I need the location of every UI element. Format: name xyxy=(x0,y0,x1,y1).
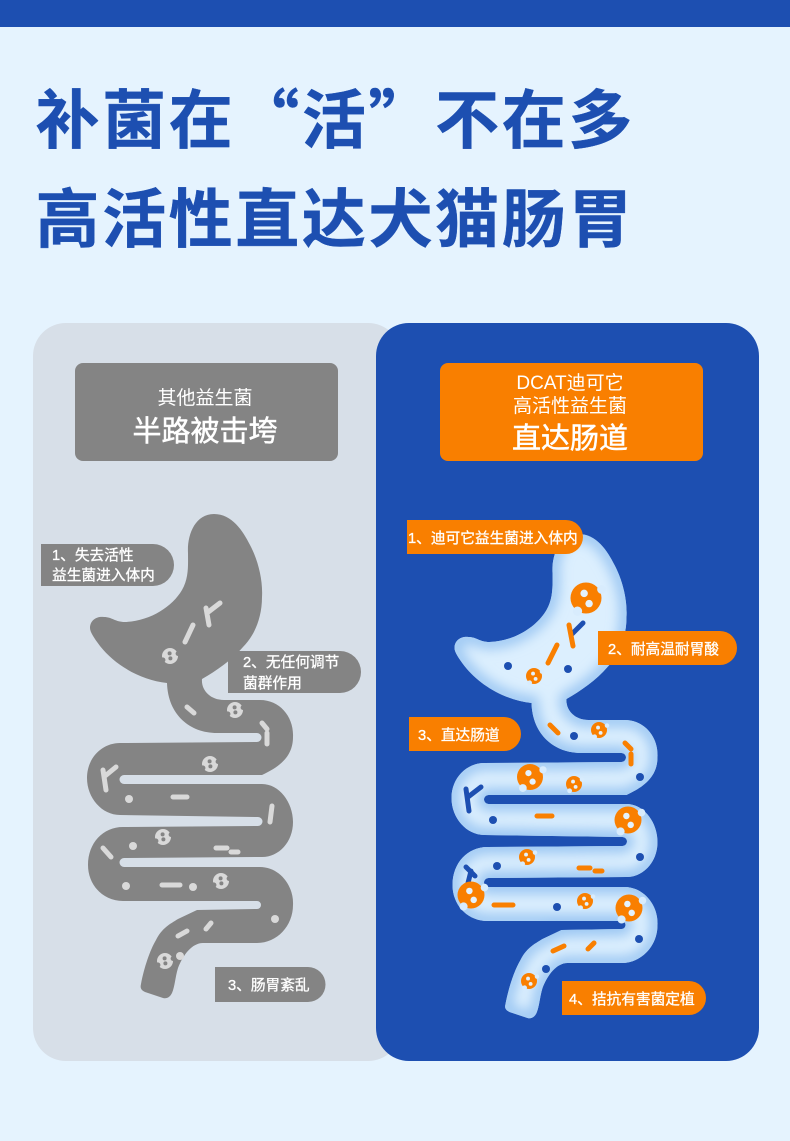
glowing gut illustration xyxy=(452,534,658,1018)
label: reaches the gut: 3、直达肠道 xyxy=(418,727,500,744)
grey gut illustration xyxy=(87,514,293,998)
heading: other probiotics: 其他益生菌 xyxy=(157,387,253,409)
top band xyxy=(0,0,790,27)
label: lost activity: 益生菌进入体内 xyxy=(52,567,155,584)
orange rods xyxy=(494,625,631,951)
heading: DCAT probiotics xyxy=(440,363,703,461)
heading: other probiotics: 半路被击垮 xyxy=(132,415,278,448)
label: lost activity xyxy=(41,544,174,586)
grey rods xyxy=(103,603,272,936)
title xyxy=(36,70,635,261)
grey bacteria xyxy=(153,648,245,969)
heading: DCAT probiotics: 高活性益生菌 xyxy=(513,395,627,417)
title: 高活性直达犬猫肠胃 xyxy=(36,169,635,261)
label: lost activity: 1、失去活性 xyxy=(52,547,134,564)
grey dots xyxy=(122,795,279,960)
label: heat and acid resistant xyxy=(598,631,737,665)
panel: other probiotics xyxy=(33,323,401,1061)
panel: DCAT probiotics xyxy=(376,323,759,1061)
label: no regulating effect xyxy=(228,651,361,693)
label: no regulating effect: 菌群作用 xyxy=(243,675,302,692)
orange bacteria xyxy=(458,582,646,990)
label: gut disorder: 3、肠胃紊乱 xyxy=(228,976,310,994)
title: 补菌在“活”不在多 xyxy=(36,70,635,162)
label: enters the body: 1、迪可它益生菌进入体内 xyxy=(408,529,578,547)
label: enters the body xyxy=(407,520,583,554)
heading: DCAT probiotics: 直达肠道 xyxy=(512,422,628,455)
label: gut disorder xyxy=(215,967,326,1002)
label: no regulating effect: 2、无任何调节 xyxy=(243,654,339,671)
blue dots xyxy=(489,662,644,973)
label: reaches the gut xyxy=(409,717,521,751)
blue y-shaped microbes xyxy=(466,623,583,883)
heading: DCAT probiotics: DCAT迪可它 xyxy=(516,372,624,394)
heading: other probiotics xyxy=(75,363,338,461)
label: heat and acid resistant: 2、耐高温耐胃酸 xyxy=(608,641,719,658)
label: antagonises harmful colonisation xyxy=(562,981,706,1015)
label: antagonises harmful colonisation: 4、拮抗有害菌定植 xyxy=(569,991,695,1008)
